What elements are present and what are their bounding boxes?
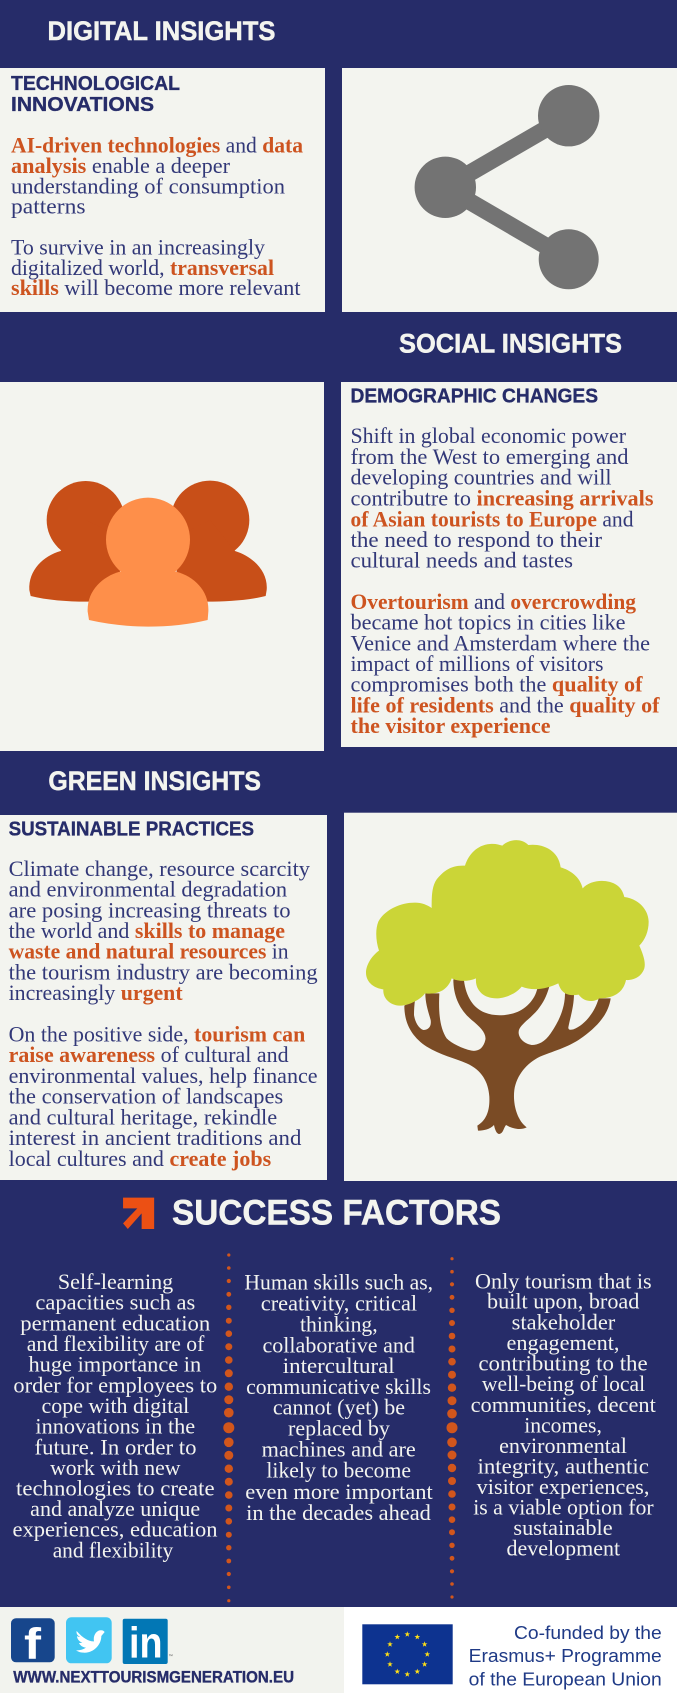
paragraph: AI-driven technologies: AI-driven technologies and data xyxy=(11,133,303,158)
heading: digital insights: DIGITAL INSIGHTS xyxy=(48,16,276,46)
text block: viable tourism: engagement, xyxy=(506,1330,620,1355)
paragraph: global economic power: of Asian tourists to Europe and xyxy=(350,506,634,531)
icon: tree xyxy=(366,840,649,1134)
paragraph: global economic power: Shift in global economic power xyxy=(350,423,627,448)
text block: human skills: intercultural xyxy=(283,1353,395,1378)
text block: viable tourism: Only tourism that is xyxy=(475,1268,652,1293)
text block: human skills: Human skills such as, xyxy=(244,1270,433,1295)
panel background xyxy=(0,815,327,1180)
paragraph: overtourism: the visitor experience xyxy=(350,713,551,738)
text block: human skills xyxy=(244,1270,433,1525)
text block: self-learning: future. In order to xyxy=(34,1434,196,1459)
funding statement xyxy=(469,1622,662,1689)
panel: demographic changes xyxy=(341,382,677,747)
panel background xyxy=(341,382,677,747)
heading: success factors xyxy=(123,1193,501,1232)
text block: human skills: thinking, xyxy=(300,1311,378,1336)
paragraph: transversal skills xyxy=(11,235,300,300)
paragraph: global economic power: developing countries and will xyxy=(350,465,612,490)
text block: self-learning: Self-learning xyxy=(58,1269,173,1294)
paragraph: positive side: the conservation of landscapes xyxy=(9,1084,283,1109)
paragraph: overtourism: life of residents and the quality of xyxy=(350,692,660,717)
paragraph: positive side: and cultural heritage, rekindle xyxy=(9,1104,277,1129)
paragraph: global economic power: contributre to increasing arrivals xyxy=(350,485,654,510)
text block: human skills: in the decades ahead xyxy=(246,1500,431,1525)
paragraph: positive side xyxy=(9,1021,318,1171)
paragraph: climate change: waste and natural resources in xyxy=(9,938,289,963)
paragraph: transversal skills: To survive in an increasingly xyxy=(11,235,265,260)
panel: sustainable practices xyxy=(0,815,327,1180)
paragraph: climate change xyxy=(9,856,318,1005)
paragraph: climate change: the world and skills to manage xyxy=(9,918,285,943)
paragraph: positive side: raise awareness of cultural and xyxy=(9,1042,289,1067)
paragraph: global economic power xyxy=(350,423,654,573)
text block: viable tourism: development xyxy=(506,1536,620,1561)
icon: share xyxy=(415,85,599,289)
text block: self-learning: order for employees to xyxy=(13,1372,217,1397)
paragraph: transversal skills: skills will become more relevant xyxy=(11,275,300,300)
text block: viable tourism: integrity, authentic xyxy=(478,1453,649,1478)
paragraph: AI-driven technologies: understanding of consumption xyxy=(11,174,285,198)
paragraph: overtourism: impact of millions of visitors xyxy=(350,651,604,676)
icon: facebook: f xyxy=(24,1619,41,1668)
panel background xyxy=(342,68,677,312)
text block: self-learning: permanent education xyxy=(20,1310,210,1335)
text block: self-learning: experiences, education xyxy=(12,1517,218,1542)
text block: human skills: likely to become xyxy=(266,1458,411,1483)
paragraph: climate change: and environmental degradation xyxy=(9,877,287,902)
text block: viable tourism: visitor experiences, xyxy=(477,1474,649,1499)
text block: viable tourism: well-being of local xyxy=(482,1371,645,1396)
footer: erasmus funding xyxy=(344,1607,677,1693)
icon: group of people xyxy=(29,481,267,627)
icon: EU flag xyxy=(362,1624,453,1684)
paragraph: overtourism xyxy=(350,589,660,738)
funding statement: Co-funded by the xyxy=(514,1622,662,1643)
text block: viable tourism: sustainable xyxy=(513,1515,613,1540)
footer background xyxy=(344,1607,677,1693)
panel background xyxy=(0,68,325,312)
text block: viable tourism: stakeholder xyxy=(512,1309,616,1334)
paragraph: positive side: On the positive side, tourism can xyxy=(9,1021,305,1046)
icon: facebook xyxy=(11,1618,55,1668)
paragraph: AI-driven technologies: patterns xyxy=(11,194,86,219)
text block: human skills: cannot (yet) be xyxy=(273,1395,405,1420)
icon: linkedin: in xyxy=(129,1618,162,1667)
text block: human skills: machines and are xyxy=(262,1437,416,1462)
panel heading: INNOVATIONS xyxy=(11,94,154,116)
paragraph: overtourism: Venice and Amsterdam where the xyxy=(350,630,650,655)
text block: self-learning: huge importance in xyxy=(28,1352,201,1377)
panel heading: DEMOGRAPHIC CHANGES xyxy=(350,386,598,408)
panel heading xyxy=(11,73,180,116)
funding statement: Erasmus+ Programme xyxy=(469,1645,662,1666)
text block: viable tourism: is a viable option for xyxy=(473,1495,654,1520)
text block: self-learning: innovations in the xyxy=(35,1414,195,1439)
paragraph: positive side: environmental values, help finance xyxy=(9,1063,318,1088)
text block: self-learning: and analyze unique xyxy=(30,1496,200,1521)
panel: people icon xyxy=(0,382,324,751)
panel heading: SUSTAINABLE PRACTICES xyxy=(9,818,254,840)
paragraph: global economic power: from the West to emerging and xyxy=(350,444,628,469)
paragraph: climate change: are posing increasing threats to xyxy=(9,897,291,922)
text block: self-learning xyxy=(12,1269,218,1562)
icon: linkedin: ™ xyxy=(168,1654,173,1658)
paragraph: global economic power: cultural needs and tastes xyxy=(350,548,573,573)
text block: viable tourism: built upon, broad xyxy=(487,1289,639,1314)
paragraph: positive side: interest in ancient traditions and xyxy=(9,1125,301,1150)
paragraph: climate change: increasingly urgent xyxy=(9,980,183,1005)
paragraph: climate change: Climate change, resource scarcity xyxy=(9,856,310,881)
divider dots: left xyxy=(223,1253,234,1602)
panel: share icon xyxy=(342,68,677,312)
text block: human skills: creativity, critical xyxy=(261,1291,417,1316)
footer: social links xyxy=(0,1607,344,1693)
icon: arrow xyxy=(123,1198,154,1229)
text block: human skills: even more important xyxy=(245,1479,433,1504)
text block: self-learning: capacities such as xyxy=(35,1290,195,1315)
paragraph: overtourism: compromises both the quality of xyxy=(350,672,643,697)
paragraph: overtourism: Overtourism and overcrowding xyxy=(350,589,636,614)
footer background xyxy=(0,1607,344,1693)
text block: human skills: replaced by xyxy=(288,1416,390,1441)
text block: viable tourism: environmental xyxy=(499,1433,627,1458)
panel background xyxy=(0,382,324,751)
text block: viable tourism xyxy=(471,1268,656,1561)
text block: human skills: communicative skills xyxy=(246,1374,431,1399)
paragraph: AI-driven technologies xyxy=(11,133,303,219)
text block: self-learning: cope with digital xyxy=(42,1393,189,1418)
panel: tree icon xyxy=(344,813,677,1181)
panel background xyxy=(344,813,677,1181)
website url: WWW.NEXTTOURISMGENERATION.EU xyxy=(13,1668,294,1686)
paragraph: transversal skills: digitalized world, transversal xyxy=(11,255,274,280)
heading: green insights: GREEN INSIGHTS xyxy=(48,766,261,796)
paragraph: global economic power: the need to respond to their xyxy=(350,527,603,552)
funding statement: of the European Union xyxy=(469,1668,662,1689)
title: SUCCESS FACTORS xyxy=(172,1193,501,1232)
paragraph: overtourism: became hot topics in cities like xyxy=(350,610,626,635)
icon: twitter xyxy=(66,1617,112,1663)
text block: viable tourism: communities, decent xyxy=(471,1392,656,1417)
text block: viable tourism: incomes, xyxy=(524,1412,602,1437)
text block: self-learning: and flexibility are of xyxy=(27,1331,205,1356)
text block: human skills: collaborative and xyxy=(262,1332,415,1357)
panel heading: TECHNOLOGICAL xyxy=(11,73,180,95)
text block: self-learning: technologies to create xyxy=(16,1476,215,1501)
text block: viable tourism: contributing to the xyxy=(478,1351,648,1376)
text block: self-learning: work with new xyxy=(50,1455,181,1480)
text block: self-learning: and flexibility xyxy=(53,1537,173,1562)
paragraph: positive side: local cultures and create jobs xyxy=(9,1146,272,1171)
paragraph: climate change: the tourism industry are becoming xyxy=(9,959,318,984)
divider dots: right xyxy=(446,1257,458,1599)
panel: technological innovations xyxy=(0,68,325,312)
heading: social insights: SOCIAL INSIGHTS xyxy=(399,329,622,359)
paragraph: AI-driven technologies: analysis enable a deeper xyxy=(11,153,231,178)
